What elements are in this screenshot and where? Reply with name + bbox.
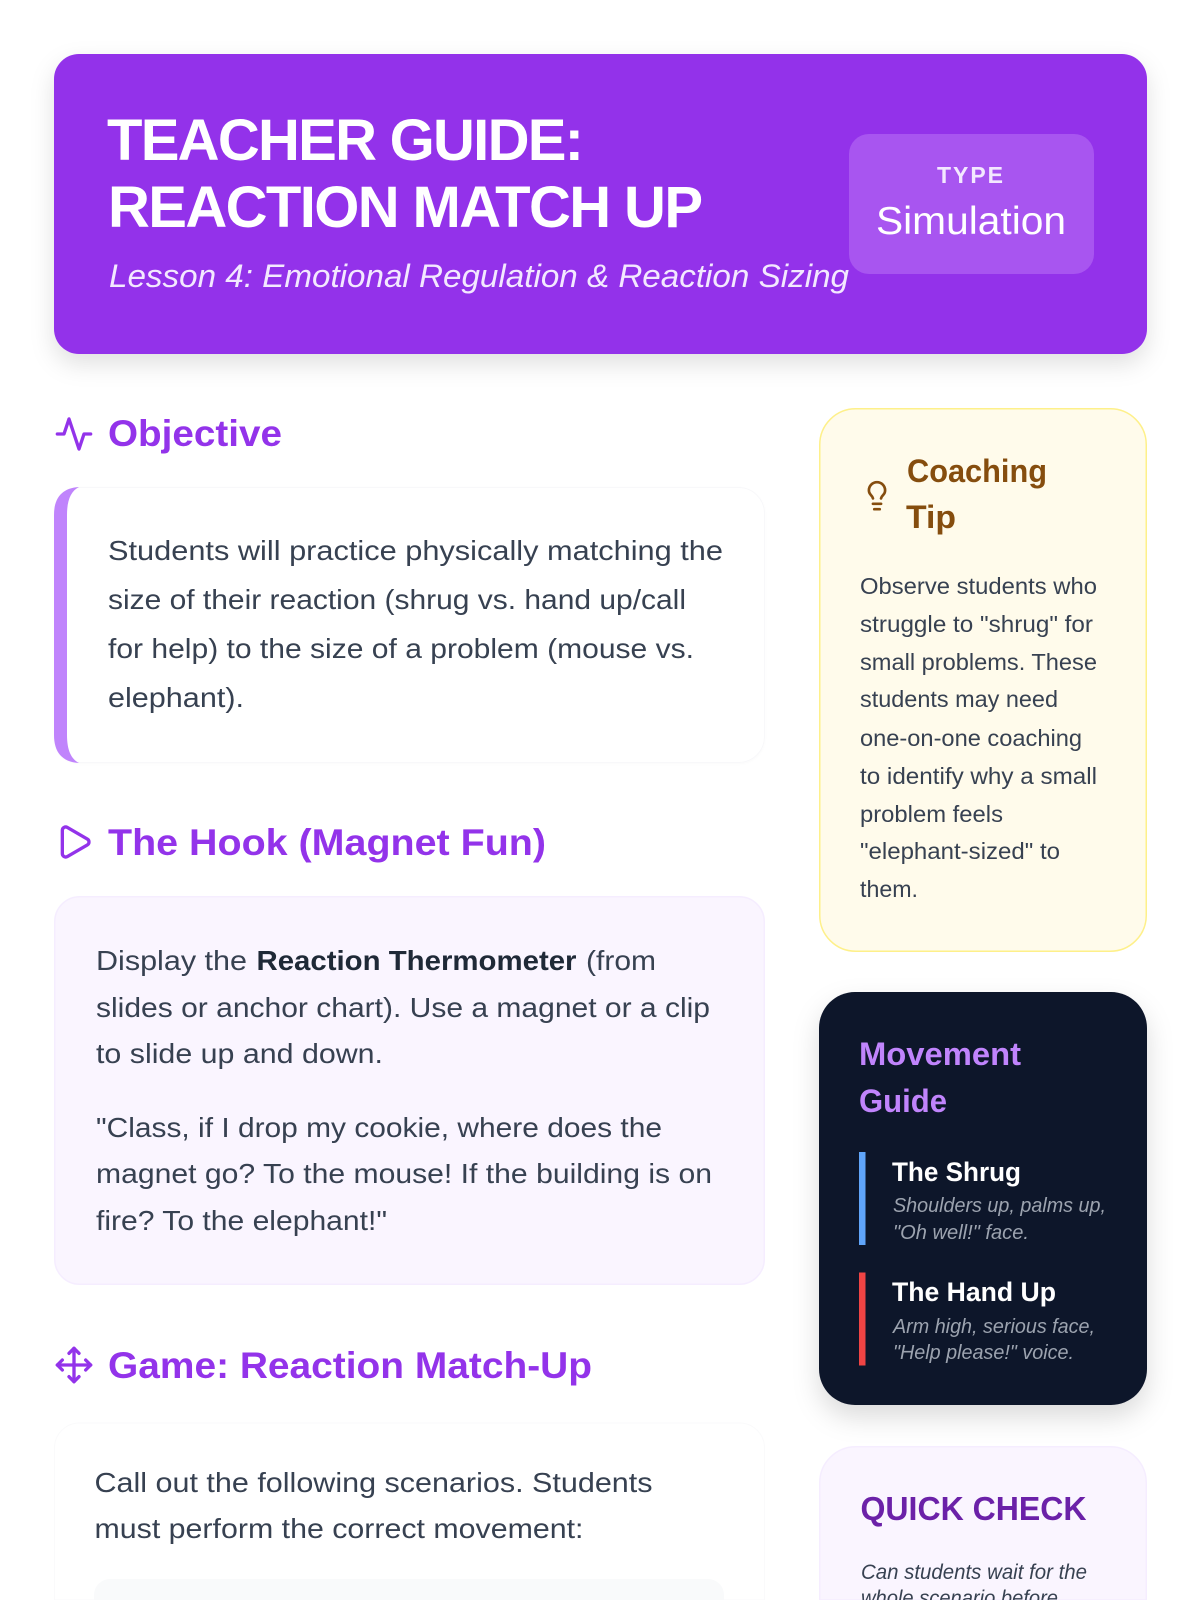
coaching tip heading: Coaching	[907, 453, 1047, 489]
coaching tip text	[860, 573, 1097, 902]
game instructions: Call out the following scenarios. Students	[94, 1467, 652, 1498]
panel: objective	[54, 487, 764, 763]
coaching tip heading: Tip	[906, 499, 956, 535]
objective text: Students will practice physically matching the	[108, 535, 723, 566]
panel: movement guide	[819, 992, 1147, 1405]
hook instructions: Display the	[96, 945, 247, 976]
hook script	[96, 1112, 712, 1236]
hook instructions: Reaction Thermometer	[256, 945, 577, 976]
hook instructions: to slide up and down.	[96, 1038, 383, 1069]
scenario list	[94, 1579, 724, 1600]
coaching tip text: "elephant-sized" to	[860, 838, 1060, 864]
header banner	[54, 54, 1147, 354]
objective text	[108, 535, 723, 713]
movement guide heading	[859, 1036, 1021, 1119]
game instructions	[94, 1467, 652, 1544]
coaching tip text: them.	[860, 876, 918, 902]
section heading: the hook: The Hook (Magnet Fun)	[108, 822, 546, 863]
panel: coaching tip	[820, 409, 1146, 951]
icon: lightbulb	[869, 482, 885, 509]
hook instructions: slides or anchor chart). Use a magnet or a clip	[96, 992, 710, 1023]
hook instructions	[96, 945, 710, 1069]
movement: the shrug: "Oh well!" face.	[893, 1222, 1029, 1244]
icon: play	[62, 827, 89, 857]
subtitle: Lesson 4: Emotional Regulation & Reaction Sizing	[109, 258, 849, 294]
title: REACTION MATCH UP	[108, 175, 703, 240]
coaching tip heading	[906, 453, 1047, 535]
coaching tip text: problem feels	[860, 801, 1003, 827]
type badge: Simulation	[876, 200, 1066, 243]
hook instructions: (from	[586, 945, 656, 976]
coaching tip text: to identify why a small	[860, 763, 1097, 789]
movement: the hand up: Arm high, serious face,	[892, 1316, 1095, 1338]
objective text: elephant).	[108, 682, 244, 713]
quick check heading: QUICK CHECK	[860, 1490, 1087, 1527]
section heading: game: Game: Reaction Match-Up	[108, 1345, 592, 1386]
movement guide heading: Guide	[859, 1083, 947, 1119]
coaching tip text: Observe students who	[860, 573, 1097, 599]
icon: activity pulse	[57, 419, 91, 449]
type badge: TYPE	[937, 162, 1003, 188]
movement: the hand up: "Help please!" voice.	[893, 1342, 1074, 1364]
accent border	[54, 487, 79, 763]
hook script: "Class, if I drop my cookie, where does the	[96, 1112, 662, 1143]
coaching tip text: struggle to "shrug" for	[860, 611, 1093, 637]
coaching tip text: one-on-one coaching	[860, 725, 1082, 751]
game instructions: must perform the correct movement:	[94, 1513, 584, 1544]
movement guide heading: Movement	[859, 1036, 1021, 1072]
quick check question: Can students wait for the	[861, 1561, 1087, 1584]
coaching tip text: students may need	[860, 686, 1058, 712]
title	[107, 108, 703, 240]
objective text: size of their reaction (shrug vs. hand up/call	[108, 584, 686, 615]
icon: move arrows	[57, 1348, 91, 1382]
panel: quick check	[820, 1447, 1146, 1600]
movement: the hand up	[859, 1272, 1095, 1366]
movement: the shrug: The Shrug	[892, 1157, 1021, 1187]
hook script: fire? To the elephant!"	[96, 1205, 387, 1236]
type badge	[849, 134, 1094, 274]
panel: hook	[55, 897, 764, 1284]
panel: game	[54, 1423, 764, 1600]
movement: the shrug: Shoulders up, palms up,	[893, 1195, 1106, 1217]
title: TEACHER GUIDE:	[107, 108, 584, 173]
movement: the hand up: The Hand Up	[892, 1277, 1056, 1307]
objective text: for help) to the size of a problem (mouse vs.	[108, 633, 694, 664]
movement: the shrug	[859, 1152, 1106, 1245]
section heading: objective: Objective	[108, 413, 282, 454]
hook script: magnet go? To the mouse! If the building is on	[96, 1158, 712, 1189]
coaching tip text: small problems. These	[860, 649, 1097, 675]
